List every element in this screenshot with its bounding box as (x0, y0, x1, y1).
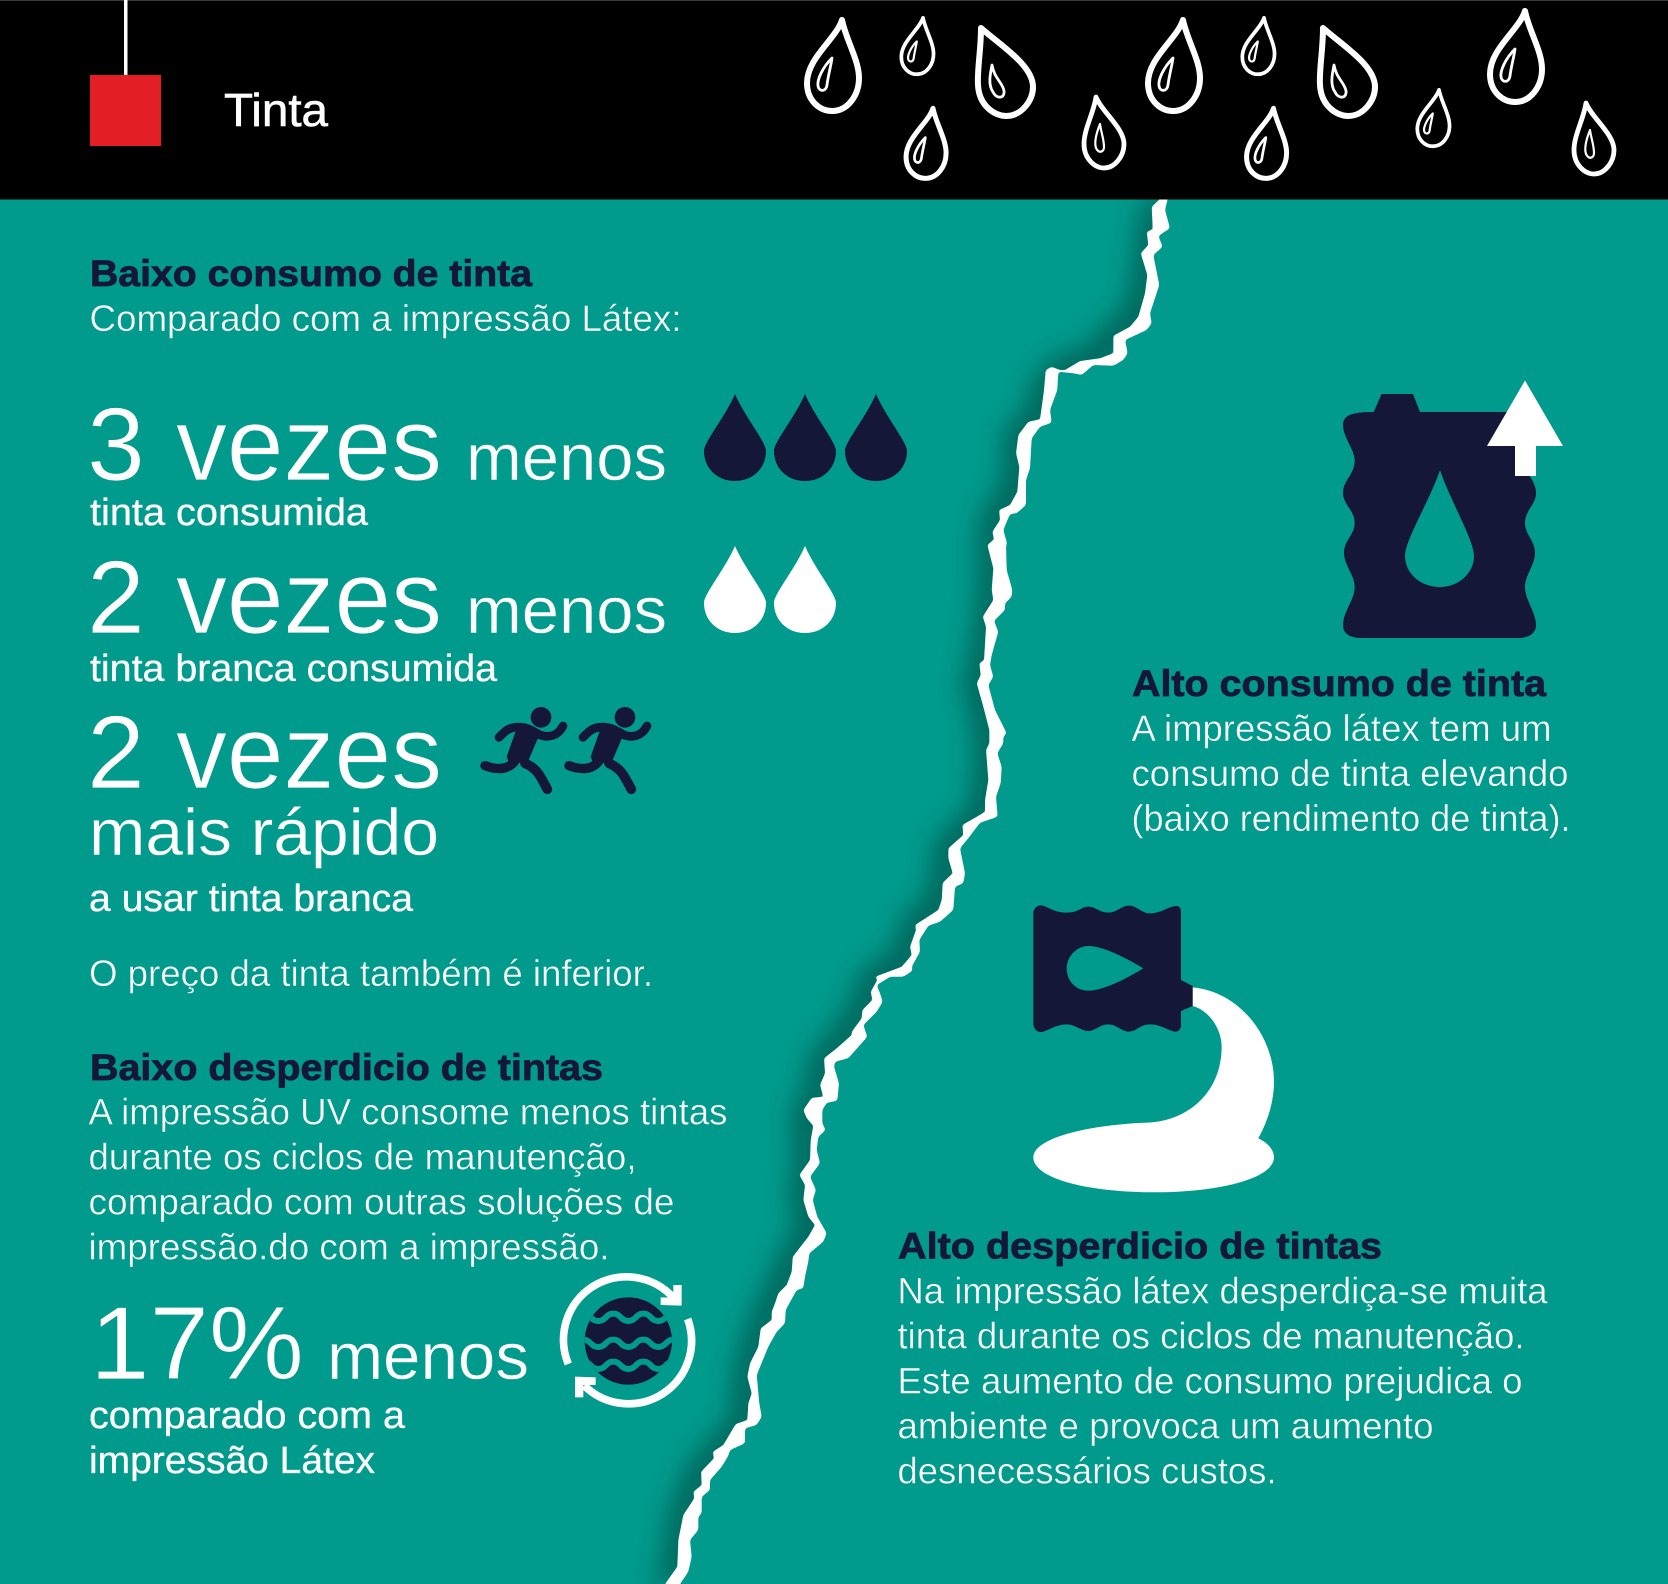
text: UV maintenance paragraph: comparado com outras soluções de (88, 1180, 674, 1222)
text: UV maintenance paragraph: durante os ciclos de manutenção, (88, 1136, 636, 1178)
text: latex consumption paragraph (1132, 707, 1570, 839)
string of the red marker (124, 0, 128, 76)
stat: 3 vezes menos: tinta consumida (90, 492, 369, 534)
heading: baixo consumo: Baixo consumo de tinta (90, 253, 532, 294)
icon: two white drops (704, 546, 836, 633)
torn paper edge (646, 200, 1170, 1584)
text: UV maintenance paragraph: impressão.do com a impressão. (88, 1226, 610, 1268)
stat: 2 vezes menos (87, 540, 667, 690)
icon: recycling water (564, 1277, 692, 1404)
stat: 3 vezes menos: 3 (87, 387, 145, 503)
text: latex consumption paragraph: (baixo rendimento de tinta). (1132, 797, 1570, 839)
text: latex waste paragraph: Este aumento de consumo prejudica o (898, 1360, 1522, 1402)
stat: 2 vezes mais rapido: 2 (87, 695, 145, 811)
icon: ink canister with up arrow (1343, 380, 1563, 638)
stat: 17% menos: impressão Látex (89, 1440, 375, 1482)
text: UV maintenance paragraph: A impressão UV consome menos tintas (88, 1090, 728, 1132)
text: latex waste paragraph: ambiente e provoca um aumento (898, 1404, 1434, 1446)
icon: three dark drops (704, 394, 907, 481)
stat: 17% menos (89, 1286, 529, 1482)
stat: 2 vezes menos: vezes (176, 540, 442, 656)
stat: 2 vezes menos: menos (466, 573, 667, 647)
icon: falling outline drops (807, 11, 1614, 178)
heading: alto desperdicio: Alto desperdicio de tintas (898, 1226, 1382, 1266)
text: UV maintenance paragraph (88, 1090, 728, 1268)
title: Tinta (224, 84, 328, 136)
stat: 2 vezes mais rapido (87, 695, 442, 920)
subheading: comparison with latex: Comparado com a impressão Látex: (90, 297, 682, 339)
stat: 3 vezes menos: vezes (176, 387, 442, 503)
heading: alto consumo: Alto consumo de tinta (1132, 663, 1546, 704)
stat: 2 vezes mais rapido: mais rápido (89, 795, 439, 869)
heading: baixo desperdicio: Baixo desperdicio de tintas (90, 1047, 603, 1088)
text: latex consumption paragraph: A impressão látex tem um (1132, 707, 1552, 749)
stat: 2 vezes mais rapido: vezes (176, 695, 442, 811)
text: ink price: O preço da tinta também é inferior. (89, 952, 653, 994)
text: latex waste paragraph: Na impressão látex desperdiça-se muita (898, 1270, 1548, 1312)
text: latex waste paragraph: tinta durante os ciclos de manutenção. (898, 1314, 1524, 1356)
text: latex waste paragraph (898, 1270, 1548, 1492)
icon: two runners (485, 707, 647, 789)
stat: 2 vezes menos: 2 (87, 540, 145, 656)
stat: 2 vezes menos: tinta branca consumida (90, 648, 498, 690)
stat: 17% menos: comparado com a (89, 1395, 406, 1437)
text: latex waste paragraph: desnecessários custos. (898, 1450, 1276, 1492)
stat: 3 vezes menos (87, 387, 667, 534)
stat: 17% menos: 17% (90, 1286, 304, 1402)
stat: 2 vezes mais rapido: a usar tinta branca (89, 878, 414, 920)
red square marker (90, 75, 161, 146)
stat: 17% menos: menos (327, 1319, 529, 1393)
icon: tipping can pouring ink (1033, 905, 1274, 1192)
text: latex consumption paragraph: consumo de tinta elevando (1132, 752, 1568, 794)
stat: 3 vezes menos: menos (466, 420, 667, 494)
header band (0, 0, 1668, 200)
